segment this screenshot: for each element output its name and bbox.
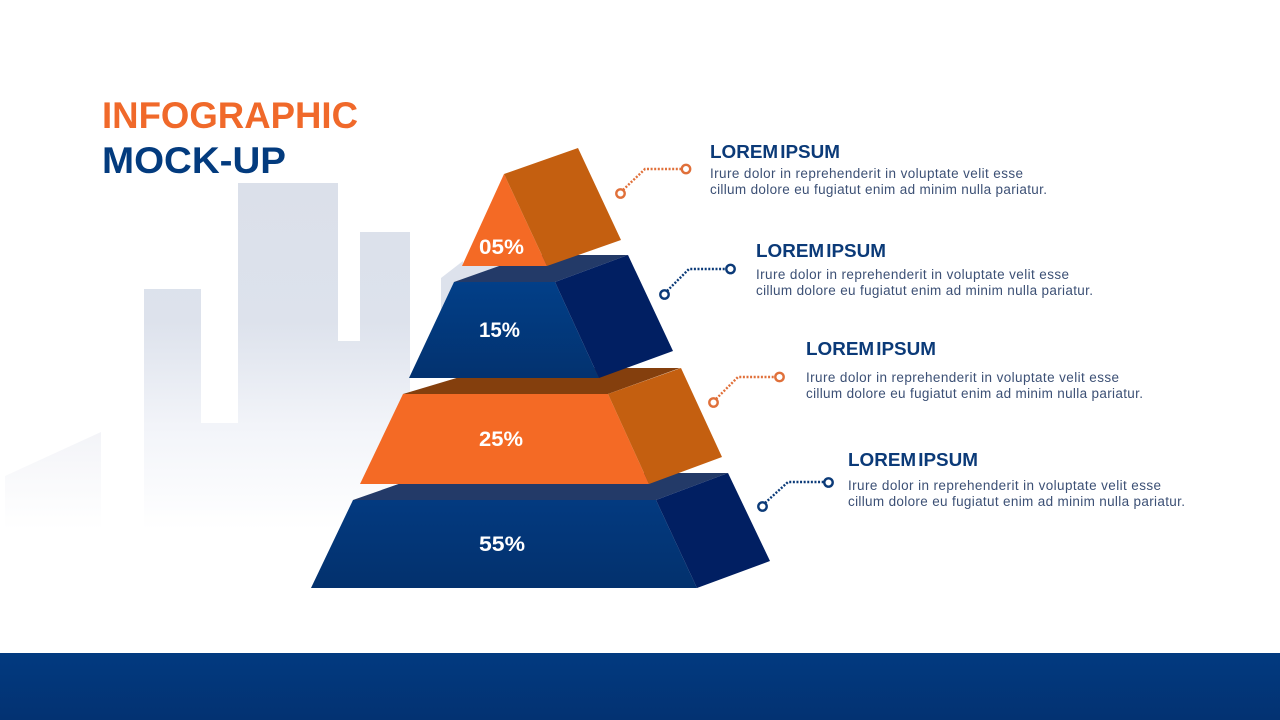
footer band (0, 653, 1280, 720)
text block 4: Irure dolor in reprehenderit in voluptate velit esse (848, 478, 1161, 493)
text block 1: LOREM IPSUM (710, 142, 840, 162)
text block 2: cillum dolore eu fugiatut enim ad minim nulla pariatur. (756, 283, 1093, 298)
text block 2 (756, 241, 1093, 298)
tier 4: 55% (311, 473, 770, 588)
connector 4 (758, 478, 833, 511)
tier 2: 15% (409, 255, 673, 378)
pyramid (311, 148, 770, 588)
tier 1: 05%: 05% (479, 236, 524, 259)
tier 2: 15%: 15% (479, 319, 520, 342)
text block 1: Irure dolor in reprehenderit in voluptate velit esse (710, 166, 1023, 181)
tier 3: 25% (360, 368, 722, 484)
title: MOCK-UP (102, 140, 286, 181)
tier 3: 25%: 25% (479, 428, 523, 451)
text block 1 (710, 142, 1047, 197)
text block 4: LOREM IPSUM (848, 450, 978, 470)
text block 2: Irure dolor in reprehenderit in voluptate velit esse (756, 267, 1069, 282)
tier 4: 55%: 55% (479, 533, 525, 556)
text block 3 (806, 339, 1143, 401)
connector 2 (660, 265, 735, 299)
title: INFOGRAPHIC (102, 95, 358, 136)
text block 4: cillum dolore eu fugiatut enim ad minim nulla pariatur. (848, 494, 1185, 509)
text block 2: LOREM IPSUM (756, 241, 886, 261)
text block 3: LOREM IPSUM (806, 339, 936, 359)
connector 3 (709, 373, 784, 407)
title (102, 95, 358, 181)
text block 3: Irure dolor in reprehenderit in voluptate velit esse (806, 370, 1119, 385)
background city skyline (5, 183, 500, 530)
tier 1: 05% (462, 148, 621, 266)
text block 3: cillum dolore eu fugiatut enim ad minim nulla pariatur. (806, 386, 1143, 401)
text block 1: cillum dolore eu fugiatut enim ad minim nulla pariatur. (710, 182, 1047, 197)
text block 4 (848, 450, 1185, 509)
connector 1 (616, 165, 690, 198)
